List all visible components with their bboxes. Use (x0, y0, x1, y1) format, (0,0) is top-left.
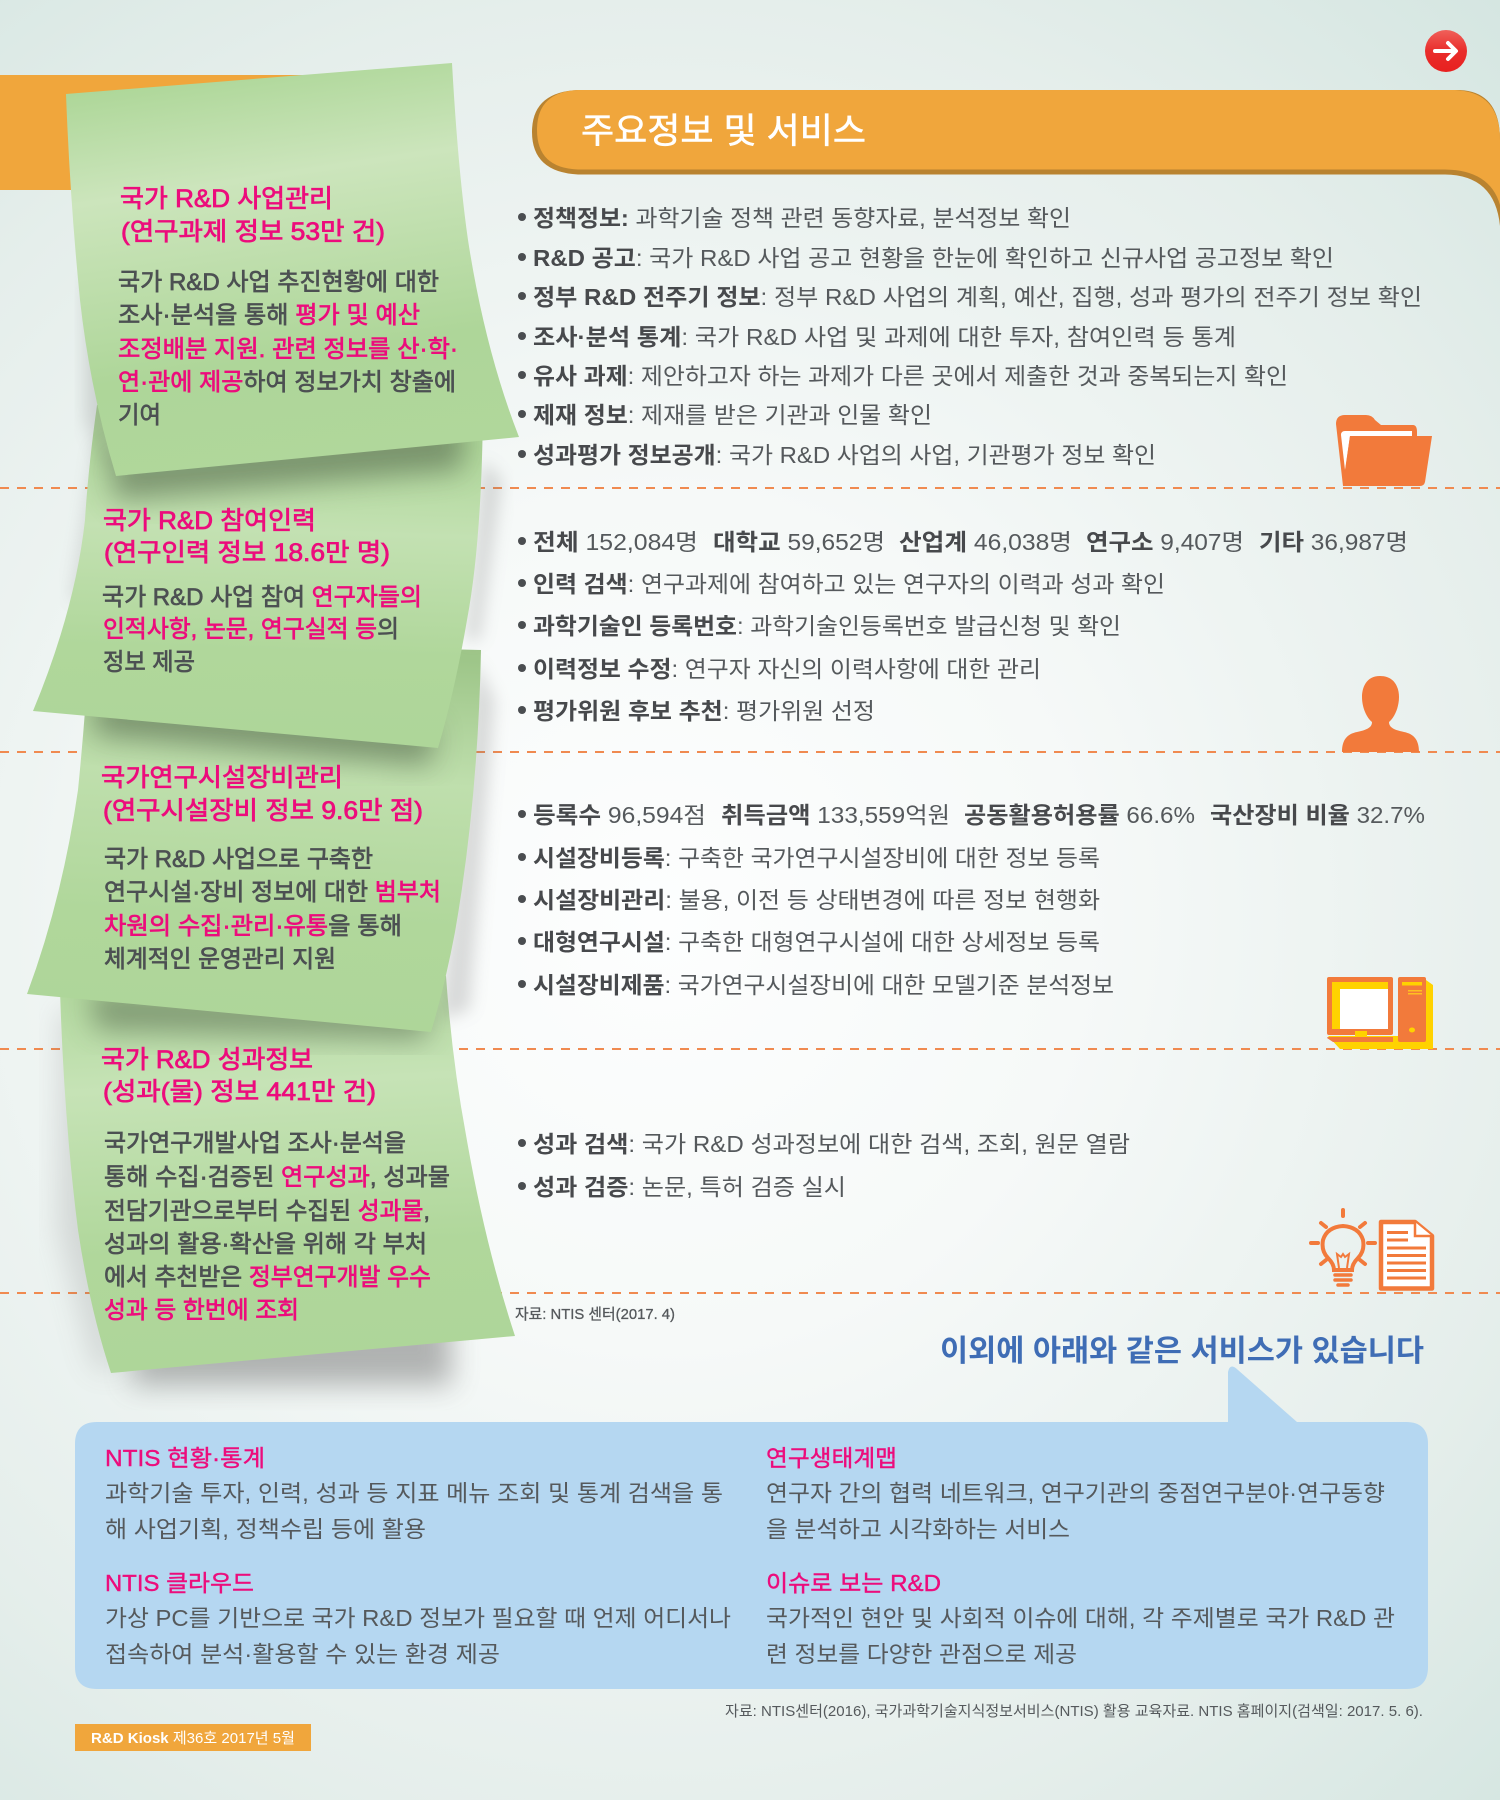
list: researchers: 산업계 46,038명 (899, 529, 1072, 555)
panel: sticky note 1 (66, 63, 519, 500)
list: facilities: 공동활용허용률 66.6% (964, 802, 1195, 828)
list: facilities: 등록수 96,594점 (533, 802, 706, 828)
icon: arrow button (1425, 30, 1467, 72)
note 2 body: 국가 R&D 사업 참여 연구자들의 (102, 584, 422, 611)
icon: computer (1327, 977, 1433, 1049)
note 3 body (104, 846, 441, 973)
note 1 body: 조사·분석을 통해 평가 및 예산 (118, 302, 420, 329)
service: ecosystem map: 연구생태계맵 (766, 1445, 897, 1471)
note 3 heading: (연구시설장비 정보 9.6만 점) (103, 797, 423, 825)
note 1 body: 연·관에 제공하여 정보가치 창출에 (118, 369, 456, 396)
note 4 body: 에서 추천받은 정부연구개발 우수 (104, 1264, 431, 1291)
note 3 body: 체계적인 운영관리 지원 (104, 946, 336, 973)
list: researchers: 대학교 59,652명 (713, 529, 885, 555)
list: researchers: 기타 36,987명 (1259, 529, 1408, 555)
list: researchers: 인력 검색: 연구과제에 참여하고 있는 연구자의 이력과 성과 확인 (533, 571, 1165, 597)
list: researchers (518, 529, 1408, 724)
note 3 body: 연구시설·장비 정보에 대한 범부처 (104, 879, 441, 906)
note 3 heading (101, 764, 423, 825)
service: ecosystem map (766, 1445, 1385, 1542)
list: results: 성과 검증: 논문, 특허 검증 실시 (533, 1174, 846, 1200)
list: facilities: 국산장비 비율 32.7% (1210, 802, 1425, 828)
list: main info: 제재 정보: 제재를 받은 기관과 인물 확인 (533, 402, 932, 428)
note 4 heading: 국가 R&D 성과정보 (101, 1046, 313, 1074)
note 4 body: 성과 등 한번에 조회 (104, 1297, 299, 1324)
icon: light bulb (1311, 1210, 1375, 1285)
note 3 body: 국가 R&D 사업으로 구축한 (104, 846, 373, 873)
list: main info: R&D 공고: 국가 R&D 사업 공고 현황을 한눈에 확인하고 신규사업 공고정보 확인 (533, 245, 1334, 271)
issue tag (75, 1724, 311, 1751)
service: issues: 련 정보를 다양한 관점으로 제공 (766, 1641, 1077, 1667)
service: ecosystem map: 연구자 간의 협력 네트워크, 연구기관의 중점연구분야·연구동향 (766, 1480, 1385, 1506)
service: statistics: NTIS 현황·통계 (105, 1445, 265, 1471)
note 2 heading: 국가 R&D 참여인력 (103, 507, 316, 535)
divider lines (0, 488, 1500, 1293)
list: researchers: 전체 152,084명 (533, 529, 698, 555)
note 1 body: 기여 (118, 402, 161, 429)
note 1 heading: (연구과제 정보 53만 건) (121, 218, 385, 246)
list: researchers: 과학기술인 등록번호 : 과학기술인등록번호 발급신청 및 확인 (533, 613, 1121, 639)
note 1 heading (120, 185, 385, 246)
speech bubble (75, 1366, 1428, 1689)
list: main info: 정부 R&D 전주기 정보 : 정부 R&D 사업의 계획, 예산, 집행, 성과 평가의 전주기 정보 확인 (533, 284, 1422, 310)
header banner (532, 90, 1500, 226)
note 3 body: 차원의 수집·관리·유통을 통해 (104, 913, 402, 940)
panel: sticky note 3 (27, 640, 495, 1040)
note 4 body: 국가연구개발사업 조사·분석을 (104, 1130, 406, 1157)
note 1 body (118, 269, 458, 429)
note 2 body: 인적사항, 논문, 연구실적 등의 (103, 616, 399, 643)
note 1 body: 조정배분 지원. 관련 정보를 산·학· (118, 336, 458, 363)
list: main info (518, 205, 1422, 468)
note 2 body: 정보 제공 (103, 649, 195, 676)
list: facilities: 시설장비관리: 불용, 이전 등 상태변경에 따른 정보 현행화 (533, 887, 1100, 913)
list: facilities: 대형연구시설: 구축한 대형연구시설에 대한 상세정보 등록 (533, 929, 1100, 955)
note 3 heading: 국가연구시설장비관리 (101, 764, 343, 792)
list: results: 성과 검색: 국가 R&D 성과정보에 대한 검색, 조회, 원문 열람 (533, 1131, 1130, 1157)
note 4 heading: (성과(물) 정보 441만 건) (103, 1078, 376, 1106)
service: cloud: 가상 PC를 기반으로 국가 R&D 정보가 필요할 때 언제 어디서나 (105, 1605, 731, 1631)
list: researchers: 이력정보 수정: 연구자 자신의 이력사항에 대한 관리 (533, 656, 1041, 682)
source note: 자료: NTIS 센터(2017. 4) (515, 1306, 675, 1323)
icon: person (1342, 676, 1419, 752)
note 4 body: 성과의 활용·확산을 위해 각 부처 (104, 1231, 427, 1258)
list: researchers: 연구소 9,407명 (1086, 529, 1244, 555)
note 4 body: 통해 수집·검증된 연구성과, 성과물 (104, 1164, 450, 1191)
note 2 heading: (연구인력 정보 18.6만 명) (104, 539, 390, 567)
note 2 body (102, 584, 422, 676)
list: facilities: 취득금액 133,559억원 (721, 802, 950, 828)
list: main info: 조사·분석 통계 : 국가 R&D 사업 및 과제에 대한 투자, 참여인력 등 통계 (533, 324, 1236, 350)
panel: other services (75, 1366, 1428, 1689)
list: main info: 유사 과제: 제안하고자 하는 과제가 다른 곳에서 제출한 것과 중복되는지 확인 (533, 363, 1288, 389)
note 1 heading: 국가 R&D 사업관리 (120, 185, 333, 213)
list: main info: 성과평가 정보공개 : 국가 R&D 사업의 사업, 기관평가 정보 확인 (533, 442, 1156, 468)
icon: document (1381, 1222, 1432, 1288)
service: issues (766, 1570, 1395, 1667)
service: issues: 이슈로 보는 R&D (766, 1570, 941, 1596)
source reference: 자료: NTIS센터(2016), 국가과학기술지식정보서비스(NTIS) 활용 교육자료. NTIS 홈페이지(검색일: 2017. 5. 6). (725, 1702, 1423, 1720)
note 4 body: 전담기관으로부터 수집된 성과물, (104, 1198, 430, 1225)
note 4 body (104, 1130, 450, 1324)
service: ecosystem map: 을 분석하고 시각화하는 서비스 (766, 1516, 1070, 1542)
panel: sticky note 4 (58, 976, 515, 1385)
service: cloud (105, 1570, 731, 1667)
list: results (518, 1131, 1130, 1200)
issue tag: R&D Kiosk 제36호 2017년 5월 (91, 1730, 295, 1747)
icon: folder (1336, 415, 1432, 486)
list: researchers: 평가위원 후보 추천 : 평가위원 선정 (533, 698, 875, 724)
list: facilities (518, 802, 1425, 998)
service: issues: 국가적인 현안 및 사회적 이슈에 대해, 각 주제별로 국가 R&D 관 (766, 1605, 1395, 1631)
service: statistics: 해 사업기획, 정책수립 등에 활용 (105, 1516, 426, 1542)
list: facilities: 시설장비등록: 구축한 국가연구시설장비에 대한 정보 등록 (533, 845, 1100, 871)
list: facilities: 시설장비제품: 국가연구시설장비에 대한 모델기준 분석정보 (533, 972, 1114, 998)
orange left band (0, 75, 310, 190)
panel: sticky note 2 (33, 405, 502, 765)
note 2 heading (103, 507, 390, 567)
service: cloud: NTIS 클라우드 (105, 1570, 254, 1596)
callout heading: 이외에 아래와 같은 서비스가 있습니다 (940, 1335, 1424, 1368)
header title: 주요정보 및 서비스 (581, 112, 866, 151)
note 4 heading (101, 1046, 376, 1106)
service: statistics: 과학기술 투자, 인력, 성과 등 지표 메뉴 조회 및 통계 검색을 통 (105, 1480, 723, 1506)
service: cloud: 접속하여 분석·활용할 수 있는 환경 제공 (105, 1641, 500, 1667)
note 1 body: 국가 R&D 사업 추진현황에 대한 (118, 269, 439, 296)
service: statistics (105, 1445, 723, 1542)
list: main info: 정책정보: 과학기술 정책 관련 동향자료, 분석정보 확인 (533, 205, 1071, 231)
